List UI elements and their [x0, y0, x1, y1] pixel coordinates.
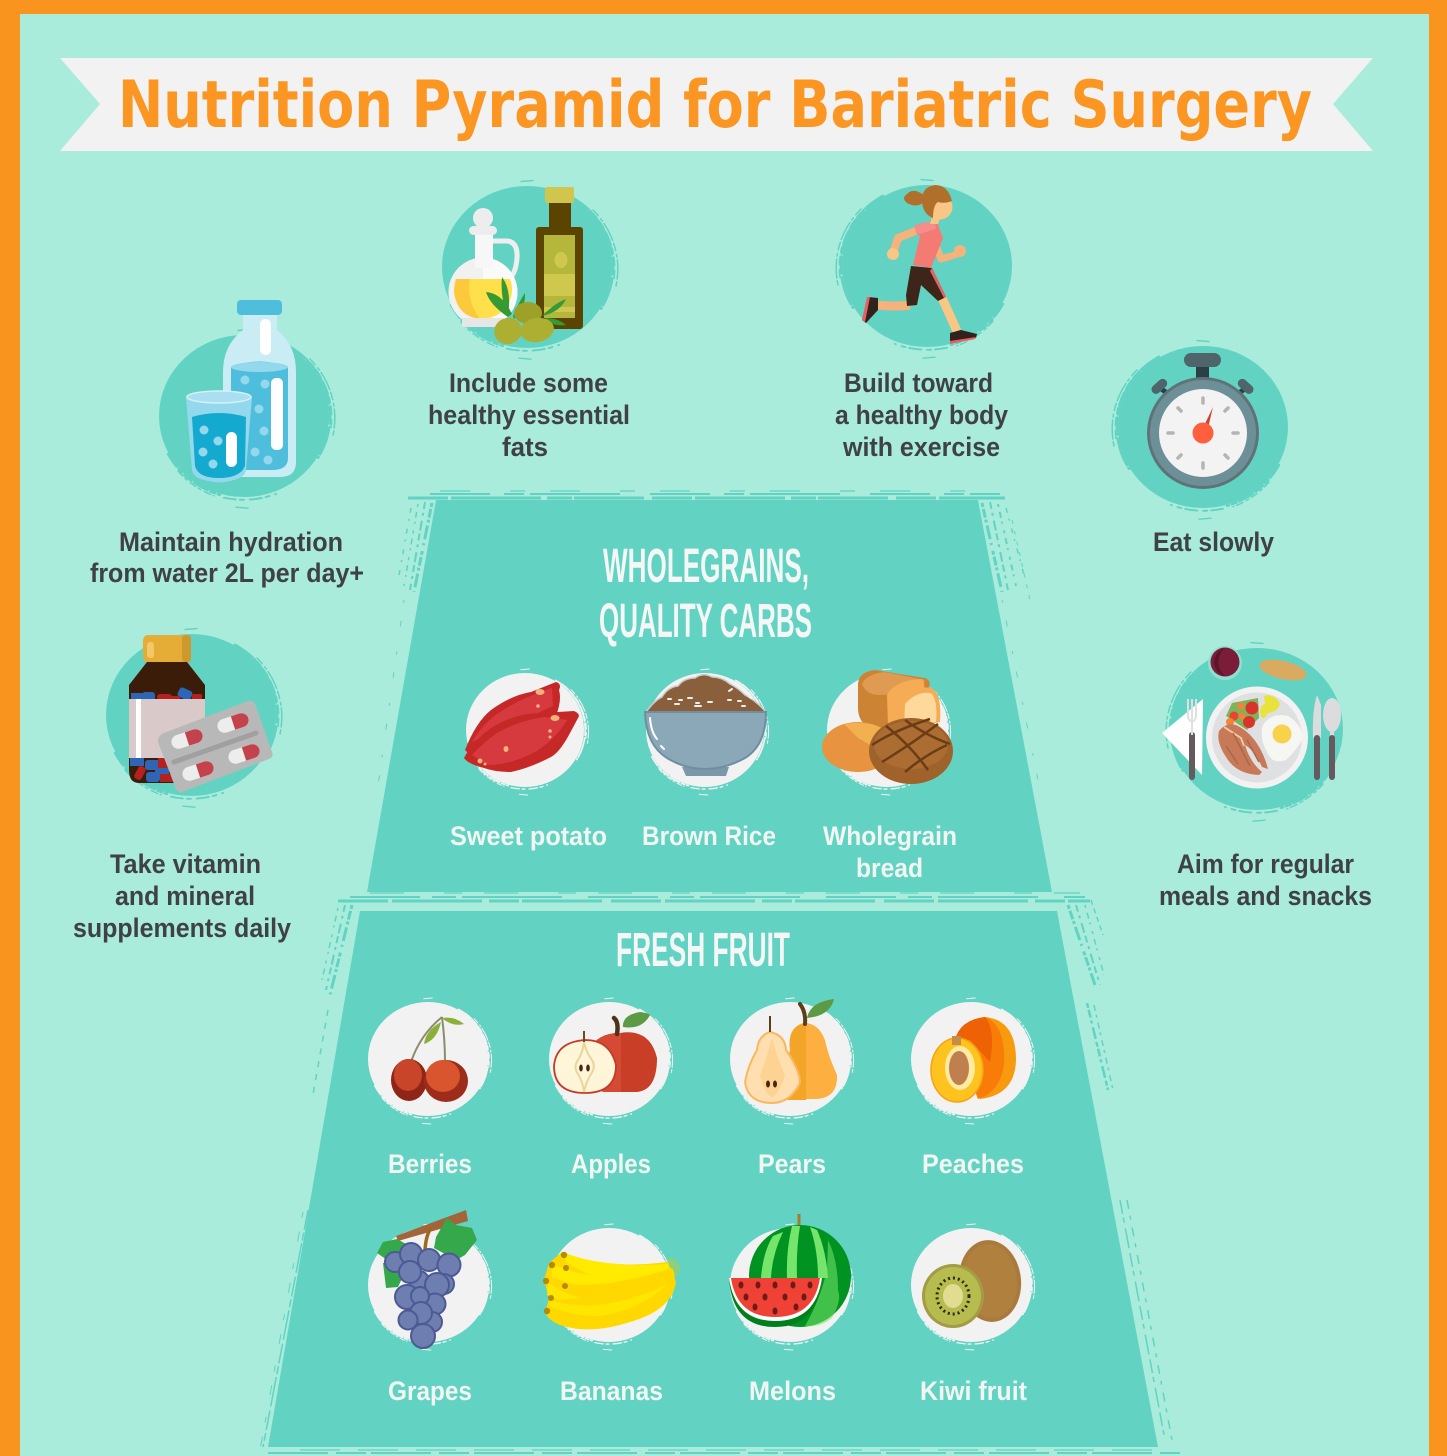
label: food names: Brown Rice [642, 821, 776, 851]
label: fruit names: Peaches [922, 1149, 1024, 1179]
caption: vitamins: and mineral [115, 881, 255, 911]
lemon [1260, 695, 1280, 718]
label: fruit names [388, 1149, 1027, 1406]
salad [1226, 698, 1259, 730]
label: fruit names: Melons [749, 1376, 836, 1406]
icon: olive oil bottle [536, 187, 583, 329]
icon: runner [862, 185, 977, 344]
label: food names: bread [856, 853, 923, 883]
caption: exercise: Build toward [844, 368, 993, 398]
fruit: apples [549, 998, 673, 1124]
title banner [60, 58, 1373, 151]
icon: vitamin bottle [129, 635, 205, 783]
heading: fresh fruit: FRESH FRUIT [616, 924, 790, 977]
panel: exercise [835, 180, 1012, 462]
panel: healthy fats [428, 181, 630, 462]
label: food names [450, 821, 957, 883]
fruit: pears [730, 998, 854, 1124]
caption: exercise [835, 368, 1008, 462]
salmon [1218, 724, 1268, 775]
caption: fats: fats [502, 432, 548, 462]
panel: fresh fruit tier [268, 911, 1158, 1447]
panel: eat slowly [1112, 341, 1288, 557]
food: brown rice [645, 669, 769, 795]
label: fruit names: Berries [388, 1149, 472, 1179]
caption: fats: healthy essential [428, 400, 630, 430]
label: fruit names: Pears [758, 1149, 826, 1179]
icon: meal plate [1162, 646, 1341, 788]
label: fruit names: Apples [571, 1149, 651, 1179]
caption: fats [428, 368, 630, 462]
egg [1262, 715, 1302, 761]
caption: fats: Include some [449, 368, 608, 398]
icon: blister pack [158, 701, 273, 792]
caption: meals: Aim for regular [1177, 849, 1354, 879]
caption: vitamins [73, 849, 291, 943]
panel: vitamins [73, 629, 291, 943]
fruit: grapes [368, 1210, 492, 1350]
panel: regular meals [1159, 643, 1372, 911]
caption: hydration: Maintain hydration [119, 527, 343, 557]
fruit: peaches [911, 998, 1035, 1124]
icon: oil jug [448, 208, 518, 327]
label: food names: Sweet potato [450, 821, 607, 851]
caption: hydration: from water 2L per day+ [90, 558, 364, 588]
heading: wholegrains [599, 540, 812, 648]
caption: vitamins: supplements daily [73, 913, 291, 943]
label: fruit names: Bananas [560, 1376, 663, 1406]
caption: meals [1159, 849, 1372, 911]
caption: vitamins: Take vitamin [110, 849, 261, 879]
fruit: kiwi [911, 1224, 1035, 1350]
label: fruit names: Kiwi fruit [920, 1376, 1027, 1406]
caption: exercise: a healthy body [835, 400, 1008, 430]
panel: wholegrains tier [367, 500, 1052, 892]
label: food names: Wholegrain [823, 821, 957, 851]
panel: hydration [90, 300, 364, 588]
icon: stopwatch [1147, 353, 1259, 489]
caption: hydration [90, 527, 364, 588]
caption: eat slowly: Eat slowly [1153, 527, 1274, 557]
fruit: cherries [368, 998, 492, 1124]
food: wholegrain bread [822, 669, 953, 795]
caption: meals: meals and snacks [1159, 881, 1372, 911]
label: fruit names: Grapes [388, 1376, 472, 1406]
heading: wholegrains: WHOLEGRAINS, [603, 540, 809, 593]
icon: water bottle [223, 300, 296, 477]
caption: exercise: with exercise [842, 432, 1000, 462]
heading: wholegrains: QUALITY CARBS [599, 595, 812, 648]
food: sweet potato [464, 669, 589, 795]
icon: olives [486, 277, 566, 348]
icon: water glass [186, 391, 252, 482]
fruit: melons [729, 1214, 854, 1350]
fruit: bananas [543, 1224, 680, 1350]
